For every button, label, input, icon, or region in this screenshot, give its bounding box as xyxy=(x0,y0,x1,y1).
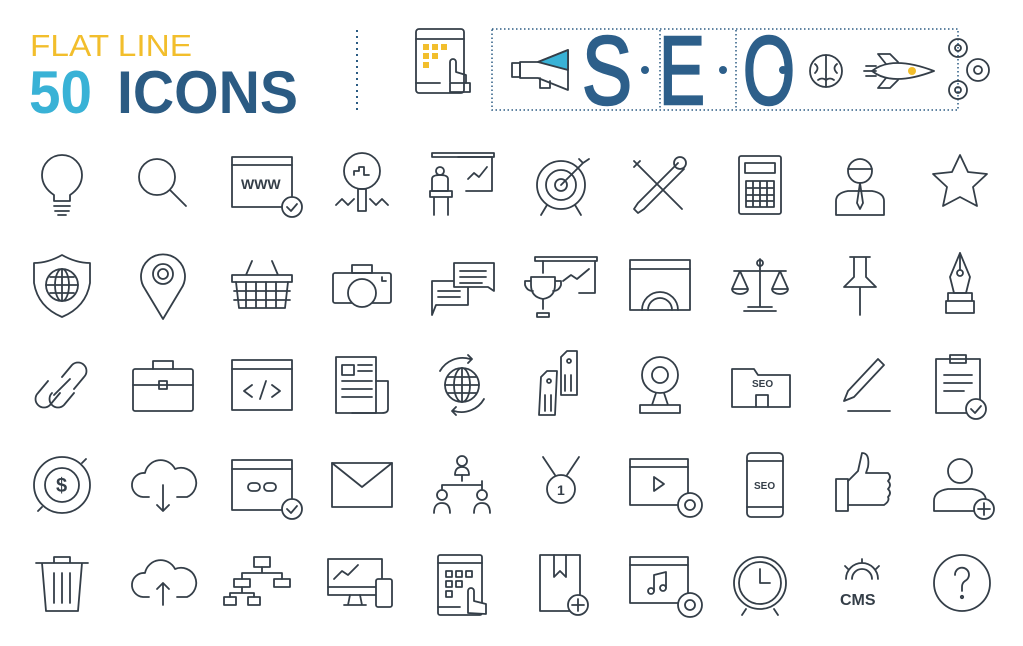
icon: camera xyxy=(333,265,391,307)
title: ICONS xyxy=(117,59,298,126)
title xyxy=(29,28,298,126)
icon: businessman xyxy=(836,159,884,215)
icon: clipboard check xyxy=(936,355,986,419)
title: 50 xyxy=(29,59,92,126)
icon: target xyxy=(537,159,589,215)
icon: megaphone xyxy=(512,50,568,90)
icon: dollar coin xyxy=(34,457,90,513)
icon: pushpin xyxy=(844,257,876,315)
icon: cloud upload xyxy=(132,560,196,605)
icon: www browser: WWW xyxy=(241,176,281,192)
icon: trophy chart xyxy=(525,257,597,317)
icon: sitemap xyxy=(224,557,290,605)
icon: cms xyxy=(840,559,879,609)
icon: basket xyxy=(232,261,292,308)
icon: add user xyxy=(934,459,994,519)
icon: envelope xyxy=(332,463,392,507)
icon: location gear xyxy=(141,254,185,319)
icon: code browser xyxy=(232,360,292,410)
icon: question xyxy=(934,555,990,611)
icon: scales xyxy=(732,259,788,311)
SEO letters xyxy=(582,16,795,125)
SEO letters: S xyxy=(582,16,632,125)
icon: browser gear xyxy=(630,260,690,310)
icon: rocket xyxy=(864,54,934,88)
icon: medal: 1 xyxy=(557,482,565,498)
icon: mobile seo xyxy=(747,453,783,517)
icon: video gear xyxy=(630,459,702,517)
icon: pen nib xyxy=(946,253,974,313)
icon: tablet touch xyxy=(416,29,470,93)
icon: calculator xyxy=(739,156,781,214)
icon: seo folder xyxy=(732,369,790,407)
icon: link browser xyxy=(232,460,302,519)
icon: cloud download xyxy=(132,460,196,511)
icon: devices xyxy=(328,559,392,607)
icon: team xyxy=(434,456,490,513)
icon: tags xyxy=(539,351,577,415)
icon: newspaper xyxy=(336,357,388,413)
icon: medal xyxy=(543,457,579,503)
icon: mobile seo: SEO xyxy=(754,481,775,492)
icon: brain xyxy=(810,55,842,87)
icon: trash xyxy=(36,557,88,611)
icon: shield globe xyxy=(34,255,90,317)
icon: pencil xyxy=(844,359,890,411)
icon: thumbs up xyxy=(836,453,890,511)
icon: dollar coin: $ xyxy=(56,475,67,497)
icon: briefcase xyxy=(133,361,193,411)
icon: star xyxy=(933,155,987,206)
icon: music gear xyxy=(630,557,702,617)
icon: clock xyxy=(734,557,786,615)
icon: tablet touch xyxy=(438,555,486,615)
icon: gears xyxy=(949,39,989,99)
icon: bookmark add xyxy=(540,555,588,615)
icon: cms: CMS xyxy=(840,592,876,609)
icon: webcam xyxy=(640,357,680,413)
icon: www browser xyxy=(232,157,302,217)
icon: magnifier xyxy=(139,159,186,206)
icon: seo folder: SEO xyxy=(752,379,773,390)
icon: tools xyxy=(634,157,686,213)
icon: bulb xyxy=(42,155,82,215)
icon: analytics search xyxy=(336,153,388,211)
icon: chat xyxy=(432,263,494,315)
icon: globe arrows xyxy=(440,355,484,415)
SEO letters: E xyxy=(659,16,705,125)
icon: presentation xyxy=(430,153,494,215)
SEO letters: O xyxy=(743,16,795,125)
icon: link xyxy=(36,363,86,407)
icon grid xyxy=(34,153,994,617)
title: FLAT LINE xyxy=(30,28,192,63)
SEO banner xyxy=(416,16,989,125)
